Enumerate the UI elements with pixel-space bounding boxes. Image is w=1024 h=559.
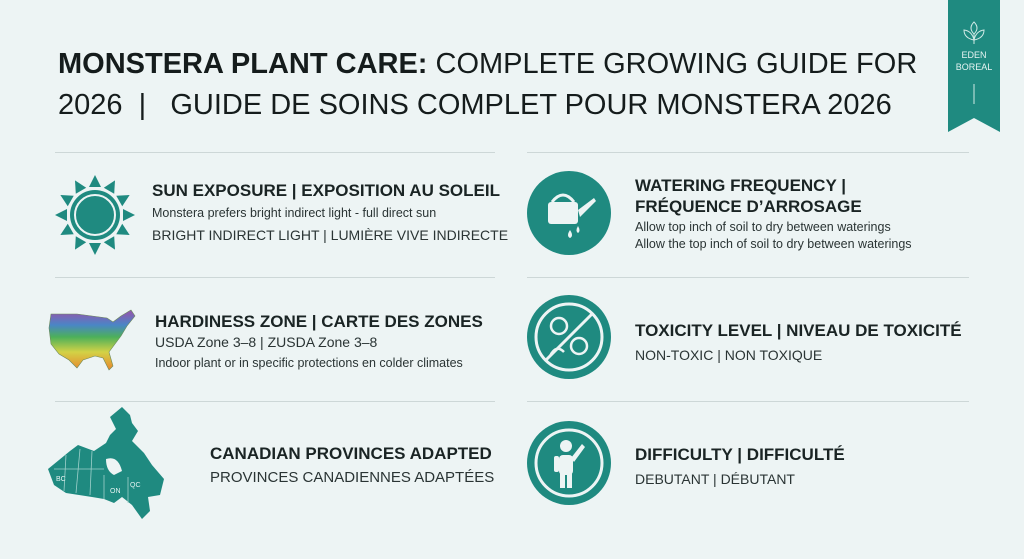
text: sun exposure: SUN EXPOSURE | EXPOSITION AU SOLEIL	[152, 181, 500, 200]
title: MONSTERA PLANT CARE: COMPLETE GROWING GUIDE FOR	[58, 48, 917, 80]
title	[58, 48, 917, 121]
text: toxicity	[635, 321, 962, 363]
badge: Eden Boreal	[948, 0, 1000, 132]
icon: Canada map: BC	[56, 476, 66, 483]
text: sun exposure: BRIGHT INDIRECT LIGHT | LUMIÈRE VIVE INDIRECTE	[152, 227, 508, 243]
text: canadian provinces: PROVINCES CANADIENNES ADAPTÉES	[210, 469, 494, 486]
text: hardiness: HARDINESS ZONE | CARTE DES ZONES	[155, 312, 483, 331]
text: difficulty: DIFFICULTY | DIFFICULTÉ	[635, 445, 845, 464]
text: toxicity: TOXICITY LEVEL | NIVEAU DE TOXICITÉ	[635, 321, 962, 340]
title: 2026 | GUIDE DE SOINS COMPLET POUR MONSTERA 2026	[58, 89, 892, 121]
badge: Eden Boreal: EDEN	[961, 50, 987, 60]
text: canadian provinces: CANADIAN PROVINCES ADAPTED	[210, 444, 492, 463]
icon: difficulty person	[527, 421, 611, 505]
text: watering	[635, 176, 912, 251]
icon: Canada map	[48, 407, 164, 519]
text: hardiness	[155, 312, 483, 370]
icon: Canada map: QC	[130, 482, 140, 489]
icon: sun	[55, 175, 135, 255]
text: difficulty: DEBUTANT | DÉBUTANT	[635, 471, 795, 487]
text: watering: FRÉQUENCE D’ARROSAGE	[635, 197, 862, 216]
icon: toxicity	[527, 295, 611, 379]
icon: USDA zone map	[48, 310, 136, 370]
text: difficulty	[635, 445, 845, 487]
icon: watering can	[527, 171, 611, 255]
text: watering: Allow the top inch of soil to dry between waterings	[635, 237, 912, 251]
text: sun exposure	[152, 181, 508, 243]
badge: Eden Boreal: BOREAL	[956, 62, 992, 72]
text: hardiness: Indoor plant or in specific protections en colder climates	[155, 356, 463, 370]
text: hardiness: USDA Zone 3–8 | ZUSDA Zone 3–8	[155, 334, 377, 350]
icon: Canada map: ON	[110, 488, 120, 495]
text: sun exposure: Monstera prefers bright indirect light - full direct sun	[152, 206, 436, 220]
text: watering: Allow top inch of soil to dry between waterings	[635, 220, 891, 234]
text: toxicity: NON-TOXIC | NON TOXIQUE	[635, 347, 822, 363]
text: canadian provinces	[210, 444, 494, 486]
text: watering: WATERING FREQUENCY |	[635, 176, 846, 195]
